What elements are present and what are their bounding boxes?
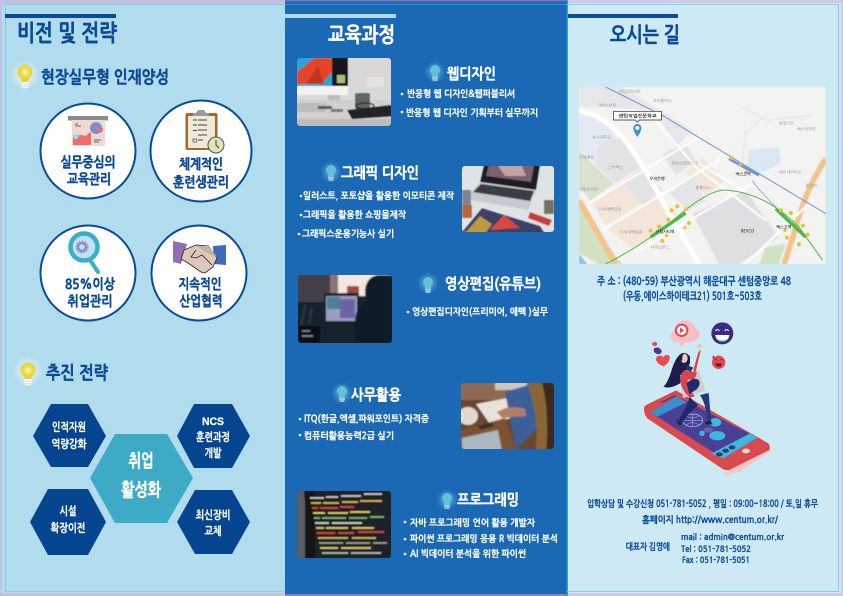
- map: 벽산e센텀: [599, 102, 616, 107]
- label: [173, 157, 229, 190]
- map: 신세계백화점: [598, 206, 621, 211]
- photo: desktop on desk: [297, 58, 391, 126]
- panel: vision and strategy: [0, 0, 285, 596]
- list: web design: 반응형 웹 디자인&웹퍼블리셔: [407, 88, 515, 99]
- text: mail, telephone, fax: mail : admin@centum.or.kr: [681, 533, 785, 542]
- icon: smiling emoji: [712, 355, 725, 369]
- list: video editing: 영상편집디자인(프리미어, 애펙 )실무: [412, 306, 548, 317]
- subheading: strategy: 추진 전략: [46, 363, 108, 382]
- hexagon: new equipment: [177, 490, 250, 554]
- heading: video editing: 영상편집(유튜브): [445, 275, 541, 292]
- list: programming: AI 빅데이터 분석을 위한 파이썬: [410, 549, 526, 559]
- heading: programming: 프로그래밍: [457, 492, 519, 508]
- icon: presentation board: [68, 116, 108, 146]
- text: homepage: 홈페이지 http://www.centum.or.kr/: [642, 514, 778, 525]
- list: programming: 파이썬 프로그래밍 응용 R 빅데이터 분석: [410, 533, 558, 544]
- hexagon: NCS course: NCS: [202, 416, 224, 428]
- panel: directions: [566, 0, 843, 596]
- title: vision and strategy: 비전 및 전략: [17, 21, 117, 45]
- callout: map label: [614, 111, 661, 122]
- photo: video editing: [298, 275, 392, 343]
- hexagon: NCS course: 훈련과정: [196, 431, 230, 443]
- circle card: practice focused: [40, 104, 136, 198]
- map: 해운대아파트: [779, 170, 802, 175]
- heading: office: 사무활용: [351, 387, 401, 403]
- title: curriculum: 교육과정: [328, 24, 395, 46]
- heading: web design: 웹디자인: [447, 66, 496, 82]
- circle card: employment: [40, 226, 136, 320]
- label: 체계적인: [179, 157, 223, 172]
- hexagon: human resources: [33, 404, 106, 467]
- icon: bulb video editing: [417, 272, 439, 294]
- icon: bulb office: [331, 382, 353, 404]
- icon: bulb programming: [436, 489, 458, 511]
- hexagon: facility relocation: 확장이전: [50, 522, 86, 534]
- map: 센텀그린타운: [618, 89, 641, 94]
- icon: laughing emoji: [711, 322, 733, 344]
- map: BEXCO: [741, 230, 754, 234]
- map: 영화의전당: [579, 186, 598, 191]
- label: 실무중심의: [60, 155, 116, 170]
- panel: curriculum: [285, 0, 567, 596]
- hexagon: facility relocation: [30, 489, 106, 555]
- icon: handshake: [173, 241, 226, 273]
- list: web design: 반응형 웹 디자인 기획부터 실무까지: [406, 107, 538, 118]
- heading: graphic design: 그래픽 디자인: [341, 165, 419, 181]
- label: [178, 277, 222, 309]
- contact info: [587, 498, 818, 565]
- circle card: trainee management: [150, 100, 252, 202]
- icon: light bulb: [13, 356, 43, 386]
- heading bar: vision: [5, 14, 116, 18]
- address: 주 소 : (480-59) 부산광역시 해운대구 센텀중앙로 48: [597, 275, 791, 287]
- address: (우동,에이스하이테크21) 501호~503호: [623, 290, 762, 302]
- hexagon: NCS course: 개발: [204, 447, 222, 459]
- hexagon: new equipment: 교체: [204, 525, 222, 537]
- list: office: [299, 413, 429, 441]
- address: [597, 275, 791, 302]
- text: mail, telephone, fax: [681, 533, 785, 565]
- label: 산업협력: [180, 294, 222, 309]
- label: 지속적인: [178, 277, 222, 292]
- text: representative: 대표자 김영애: [626, 541, 670, 552]
- map: 세이브존스: [651, 245, 670, 250]
- icon: clipboard and clock: [186, 110, 224, 153]
- woman: [663, 344, 713, 426]
- hexagon: employment activation: 활성화: [121, 480, 161, 499]
- map: 벡산아파트: [797, 126, 816, 131]
- hexagon: human resources: 역량강화: [52, 438, 87, 450]
- subheading: field-oriented talent: 현장실무형 인재양성: [41, 68, 169, 86]
- label: [60, 155, 116, 187]
- photo: code on a screen: [297, 491, 391, 558]
- icon: magnifier with gear: [70, 234, 98, 272]
- map: 우리은행: [650, 176, 665, 181]
- map: 코아플렉스: [653, 98, 672, 103]
- map: 올림픽: [806, 183, 817, 188]
- text: mail, telephone, fax: Tel : 051-781-5052: [681, 545, 751, 554]
- hexagon: human resources: 인적자원: [52, 421, 86, 433]
- map: 센텀병원: [579, 155, 594, 160]
- icon: hearts: [652, 342, 670, 366]
- list: office: ITQ(한글,엑셀,파워포인트) 자격증: [304, 413, 429, 424]
- hexagon: facility relocation: 시설: [60, 505, 76, 517]
- map: 벡스코역: [776, 224, 792, 229]
- list: programming: 자바 프로그래밍 언어 활용 개발자: [410, 517, 535, 528]
- list: web design: [401, 88, 538, 118]
- title: directions: 오시는 길: [610, 24, 680, 46]
- icon: play bubble: [671, 320, 700, 347]
- list: graphic design: 그래픽스운용기능사 실기: [302, 228, 394, 239]
- map: 신세계백화점: [620, 230, 642, 235]
- map: 동일가든: [779, 121, 794, 126]
- photo: people working: [461, 383, 554, 449]
- list: graphic design: [298, 190, 454, 239]
- heading bar: curriculum: [285, 14, 396, 18]
- icon: bulb graphic design: [320, 161, 342, 183]
- list: graphic design: 일러스트, 포토샵을 활용한 이모티콘 제작: [303, 190, 454, 201]
- map: 스타벅스: [608, 165, 623, 170]
- icon: light bulb: [10, 60, 40, 90]
- map: [579, 87, 826, 264]
- icon: bulb web design: [424, 61, 446, 83]
- text: mail, telephone, fax: Fax : 051-781-5051: [682, 556, 750, 565]
- map: 동서대학교: [592, 135, 611, 140]
- map: 한화오벨리스크: [672, 161, 698, 166]
- label: 훈련생관리: [173, 175, 229, 190]
- circle card: industry cooperation: [152, 226, 246, 320]
- label: 85%이상: [65, 277, 116, 292]
- callout: map label: 센텀직업전문학교: [618, 114, 657, 119]
- illustration: phone and woman: [644, 320, 773, 476]
- icon: map pin: [633, 124, 641, 137]
- list: office: 컴퓨터활용능력2급 실기: [304, 430, 394, 441]
- phone: [644, 390, 773, 476]
- label: 교육관리: [67, 172, 111, 187]
- list: programming: [404, 517, 558, 559]
- hexagon: employment activation: [90, 434, 193, 523]
- map: 홈플러스: [696, 185, 711, 190]
- label: [65, 277, 116, 309]
- hexagon: new equipment: 최신장비: [196, 509, 230, 521]
- list: graphic design: 그래픽을 활용한 쇼핑몰제작: [303, 209, 406, 220]
- map: 센텀시티역: [656, 229, 675, 234]
- hexagon: employment activation: 취업: [128, 451, 154, 470]
- label: 취업관리: [68, 294, 112, 309]
- map: 벡스코역: [736, 172, 751, 177]
- heading bar: directions: [568, 14, 678, 18]
- hexagon: NCS course: [177, 404, 250, 468]
- photo: laptop with paints: [462, 166, 554, 232]
